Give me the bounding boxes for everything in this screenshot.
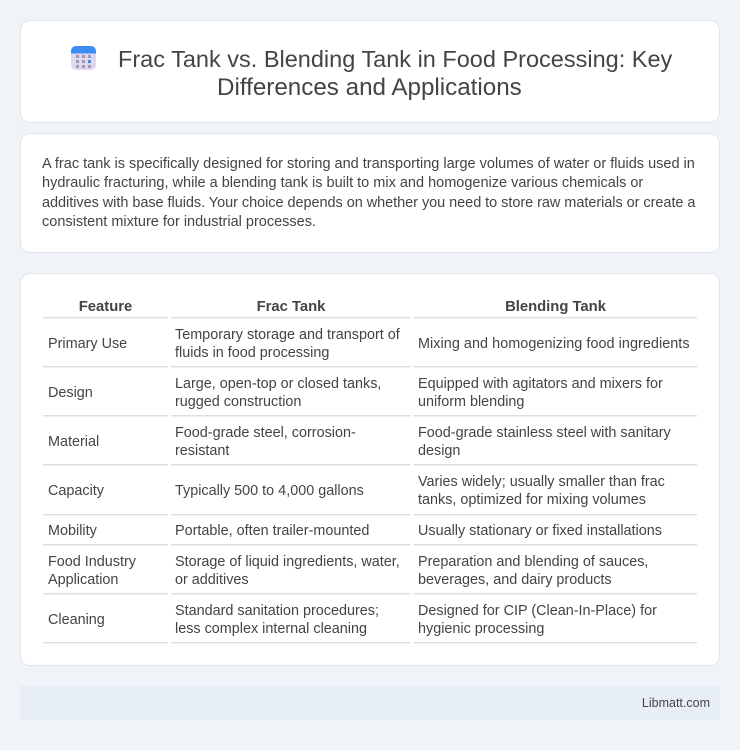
row: Mobility [48, 523, 662, 539]
row: Food Industry Application: or additives [175, 572, 249, 588]
row: Cleaning: Standard sanitation procedures; [175, 603, 379, 619]
row: Capacity [48, 474, 665, 508]
row: Mobility: Portable, often trailer-mounted [175, 523, 369, 539]
row: Primary Use: Temporary storage and transport of [175, 327, 400, 343]
title card [20, 20, 720, 123]
row: Design: Large, open-top or closed tanks, [175, 376, 381, 392]
row: Cleaning [48, 603, 657, 637]
row: Cleaning: Cleaning [48, 612, 105, 628]
row: Cleaning: Designed for CIP (Clean-In-Place) for [418, 603, 657, 619]
row: Primary Use: fluids in food processing [175, 345, 329, 361]
title: Frac Tank vs. Blending Tank in Food Processing: Key [118, 46, 672, 72]
row: Primary Use [48, 327, 690, 361]
row: Material: Food-grade stainless steel with sanitary [418, 425, 671, 441]
row: Food Industry Application: Application [48, 572, 118, 588]
intro text: consistent mixture for industrial processes. [42, 214, 316, 230]
comparison table card [20, 273, 720, 666]
title: Differences and Applications [217, 74, 522, 101]
row: Food Industry Application [48, 554, 648, 588]
row: Material: resistant [175, 443, 229, 459]
row: Capacity: Capacity [48, 483, 104, 499]
row: Design: uniform blending [418, 394, 524, 410]
row: Material: design [418, 443, 460, 459]
row: Primary Use: Primary Use [48, 336, 127, 352]
row: Food Industry Application: Preparation and blending of sauces, [418, 554, 648, 570]
row: Material [48, 425, 671, 459]
row: Design: rugged construction [175, 394, 301, 410]
intro card [20, 133, 720, 253]
intro text: hydraulic fracturing, while a blending tank is built to mix and homogenize various chemicals or [42, 175, 643, 191]
footer credit: Libmatt.com [642, 696, 710, 710]
row: Mobility: Mobility [48, 523, 97, 539]
row: Food Industry Application: Storage of liquid ingredients, water, [175, 554, 400, 570]
intro text [42, 156, 696, 230]
row: Primary Use: Mixing and homogenizing food ingredients [418, 336, 690, 352]
row: Material: Food-grade steel, corrosion- [175, 425, 356, 441]
row: Cleaning: less complex internal cleaning [175, 621, 367, 637]
icon: calendar [71, 46, 96, 70]
table heading: Blending Tank: Blending Tank [505, 299, 606, 315]
intro text: A frac tank is specifically designed for storing and transporting large volumes of water or fluids used in [42, 156, 695, 172]
row: Capacity: Typically 500 to 4,000 gallons [175, 483, 364, 499]
row: Design: Equipped with agitators and mixers for [418, 376, 663, 392]
table heading: Frac Tank: Frac Tank [257, 299, 325, 315]
title [118, 46, 672, 101]
row: Design [48, 376, 663, 410]
row: Cleaning: hygienic processing [418, 621, 544, 637]
row: Food Industry Application: beverages, and dairy products [418, 572, 612, 588]
footer bar [20, 686, 720, 720]
row: Capacity: Varies widely; usually smaller than frac [418, 474, 665, 490]
row: Food Industry Application: Food Industry [48, 554, 136, 570]
row: Mobility: Usually stationary or fixed installations [418, 523, 662, 539]
table heading: Feature: Feature [79, 299, 132, 315]
row: Material: Material [48, 434, 99, 450]
intro text: additives with base fluids. Your choice depends on whether you need to store raw materials or create a [42, 195, 695, 211]
row: Design: Design [48, 385, 93, 401]
row: Capacity: tanks, optimized for mixing volumes [418, 492, 646, 508]
